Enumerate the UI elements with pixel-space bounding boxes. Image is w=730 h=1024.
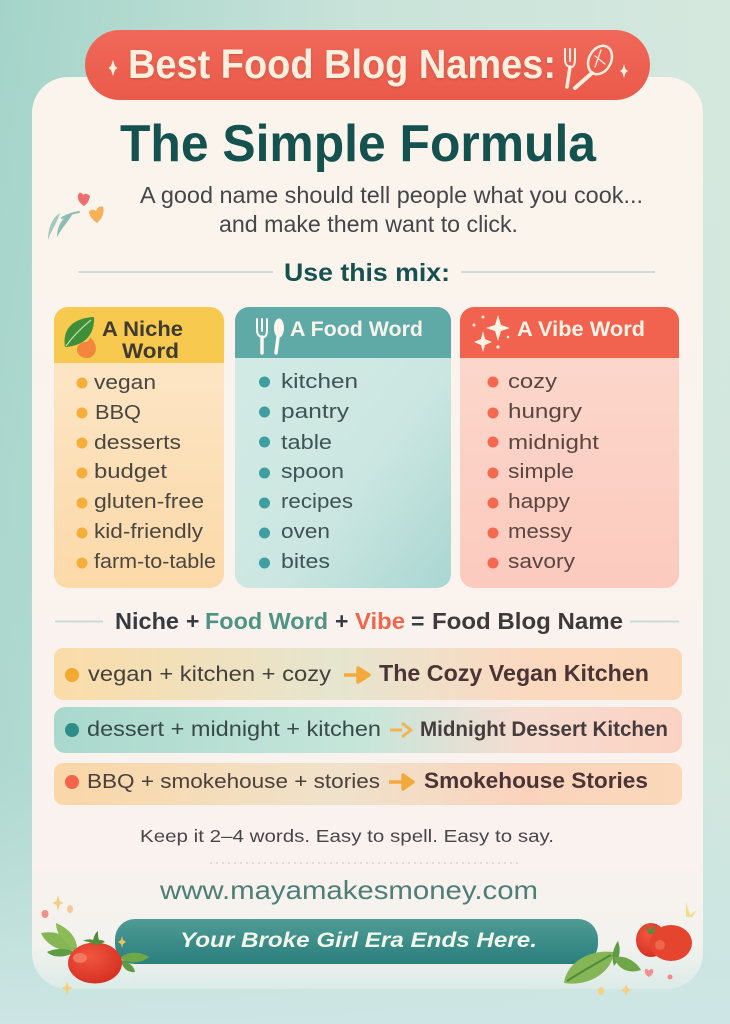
example row: midnight dessert kitchen: dessert + midnight + kitchen bbox=[87, 717, 381, 741]
tip text: Keep it 2–4 words. Easy to spell. Easy to say. bbox=[140, 826, 554, 846]
example row: smokehouse stories: BBQ + smokehouse + stories bbox=[87, 770, 380, 793]
list: niche words: desserts bbox=[94, 432, 181, 454]
icon: fork and spoon bbox=[257, 319, 284, 353]
list: niche words: kid-friendly bbox=[94, 521, 203, 543]
panel: food word bbox=[235, 307, 451, 588]
formula line: Food Blog Name bbox=[432, 608, 623, 634]
icon: fork and whisk bbox=[565, 42, 617, 88]
formula line: Food Word bbox=[205, 608, 328, 634]
banner heading: Best Food Blog Names: bbox=[128, 41, 556, 87]
formula line: = bbox=[411, 608, 424, 634]
formula line: Vibe bbox=[355, 608, 405, 634]
bullet bbox=[65, 668, 79, 682]
list: niche words: BBQ bbox=[95, 402, 141, 424]
header text: Word bbox=[122, 340, 179, 363]
icon: small decorations bbox=[42, 895, 697, 996]
example row: cozy vegan kitchen: The Cozy Vegan Kitchen bbox=[379, 660, 649, 686]
icon: right basil leaves bbox=[564, 941, 641, 984]
bullet bbox=[65, 723, 79, 737]
icon: hearts and leaf sprig bbox=[48, 193, 104, 240]
list: niche words: vegan bbox=[94, 372, 156, 394]
header text: A Food Word bbox=[290, 318, 423, 341]
list: niche words: farm-to-table bbox=[94, 551, 216, 573]
main heading: The Simple Formula bbox=[120, 115, 597, 173]
list: food words: pantry bbox=[281, 401, 349, 423]
formula line: + bbox=[186, 608, 199, 634]
list: vibe words: simple bbox=[508, 461, 574, 483]
section heading: use this mix: Use this mix: bbox=[284, 259, 450, 287]
formula line: + bbox=[335, 608, 348, 634]
list: vibe words: hungry bbox=[508, 401, 582, 423]
example row: cozy vegan kitchen bbox=[54, 648, 682, 700]
intro text: and make them want to click. bbox=[219, 211, 518, 237]
icon: sparkles bbox=[108, 60, 628, 78]
list: vibe words bbox=[488, 371, 600, 573]
panel: vibe word bbox=[460, 307, 679, 588]
icon: right tomato bbox=[636, 923, 692, 961]
website url: www.mayamakesmoney.com bbox=[159, 875, 538, 905]
icon: left tomato with leaves bbox=[41, 923, 149, 984]
header text: A Niche bbox=[102, 318, 183, 341]
list: niche words bbox=[76, 372, 216, 573]
list: vibe words: messy bbox=[508, 521, 572, 543]
list: food words: spoon bbox=[281, 461, 344, 483]
icon: flame bbox=[77, 337, 96, 358]
list: niche words: gluten-free bbox=[94, 491, 204, 513]
icon: sparkles bbox=[472, 315, 510, 352]
list: vibe words: happy bbox=[508, 491, 570, 513]
example row: smokehouse stories: Smokehouse Stories bbox=[424, 768, 648, 793]
icon: leaf bbox=[65, 317, 94, 347]
list: food words: bites bbox=[281, 551, 330, 573]
example row: cozy vegan kitchen: vegan + kitchen + cozy bbox=[88, 662, 331, 686]
list: niche words: budget bbox=[94, 461, 168, 483]
footer banner bbox=[115, 919, 598, 964]
list: vibe words: cozy bbox=[508, 371, 557, 393]
intro text bbox=[140, 182, 643, 237]
list: vibe words: midnight bbox=[508, 432, 600, 454]
example row: smokehouse stories bbox=[54, 763, 682, 805]
list: food words: table bbox=[281, 432, 332, 454]
arrow bbox=[389, 775, 413, 789]
intro text: A good name should tell people what you cook... bbox=[140, 182, 643, 208]
list: food words: recipes bbox=[281, 491, 353, 513]
list: food words: oven bbox=[281, 521, 330, 543]
title banner bbox=[85, 30, 650, 100]
arrow bbox=[390, 723, 411, 737]
footer banner: Your Broke Girl Era Ends Here. bbox=[180, 929, 537, 952]
example row: midnight dessert kitchen bbox=[54, 707, 682, 753]
formula line: Niche bbox=[115, 608, 179, 634]
arrow bbox=[344, 668, 369, 682]
panel: niche word bbox=[54, 307, 224, 588]
header text: A Vibe Word bbox=[517, 318, 645, 341]
list: food words bbox=[259, 371, 358, 573]
header text bbox=[102, 318, 183, 363]
list: food words: kitchen bbox=[281, 371, 358, 393]
bullet bbox=[65, 775, 79, 789]
formula line bbox=[55, 608, 679, 634]
list: vibe words: savory bbox=[508, 551, 575, 573]
example row: midnight dessert kitchen: Midnight Dessert Kitchen bbox=[420, 718, 668, 741]
